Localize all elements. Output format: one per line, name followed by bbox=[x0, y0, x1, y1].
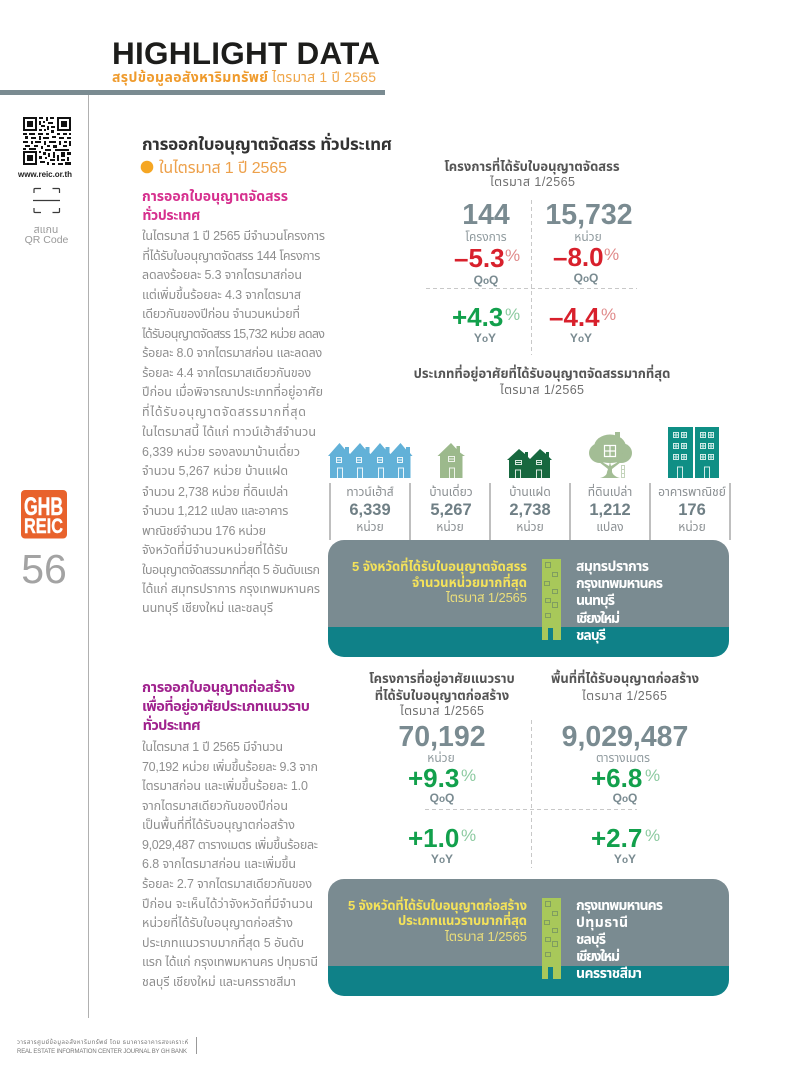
province list: ชลบุรี bbox=[576, 627, 606, 644]
housing types heading bbox=[414, 364, 670, 397]
column: semi-detached house: บ้านแฝด bbox=[509, 485, 551, 499]
stat: 70,192 units: 70,192 bbox=[398, 721, 486, 753]
panel heading: จำนวนหน่วยมากที่สุด bbox=[412, 573, 527, 590]
column: detached house: บ้านเดี่ยว bbox=[429, 483, 473, 499]
section 2 body text: ไตรมาสก่อน และเพิ่มขึ้นร้อยละ 1.0 bbox=[141, 777, 308, 793]
stats heading: horizontal housing bbox=[369, 669, 515, 718]
section 2 body text: ร้อยละ 2.7 จากไตรมาสเดียวกันของ bbox=[142, 877, 312, 891]
housing type columns bbox=[330, 483, 730, 540]
province list: เชียงใหม่ bbox=[576, 948, 620, 964]
section 1 body text: แต่เพิ่มขึ้นร้อยละ 4.3 จากไตรมาส bbox=[142, 286, 301, 302]
stat: projects YoY: +4.3 bbox=[452, 302, 503, 332]
section 2 body text: หน่วยที่ได้รับใบอนุญาตก่อสร้าง bbox=[142, 914, 293, 930]
panel heading bbox=[352, 557, 527, 605]
panel heading bbox=[348, 896, 527, 944]
section 2 body text: 9,029,487 ตารางเมตร เพิ่มขึ้นร้อยละ bbox=[142, 836, 318, 852]
stat: projects QoQ: –5.3 bbox=[454, 243, 505, 273]
sidebar divider bbox=[88, 95, 89, 1018]
scan caption bbox=[25, 224, 69, 246]
column: semi-detached house bbox=[509, 485, 551, 534]
section 2 body text: 70,192 หน่วย เพิ่มขึ้นร้อยละ 9.3 จาก bbox=[142, 758, 318, 774]
section 1 body text: นนทบุรี เชียงใหม่ และชลบุรี bbox=[142, 601, 273, 615]
stat: units QoQ: QoQ bbox=[430, 791, 454, 805]
province list: นครราชสีมา bbox=[576, 965, 642, 981]
icon: vacant land tree bbox=[589, 432, 632, 478]
section 1 body text: ได้รับอนุญาตจัดสรร 15,732 หน่วย ลดลง bbox=[141, 327, 325, 341]
section 2 body text: ชลบุรี เชียงใหม่ และนครราชสีมา bbox=[142, 975, 296, 989]
footer credit: REAL ESTATE INFORMATION CENTER JOURNAL BY GH BANK bbox=[17, 1049, 187, 1055]
stats heading: permitted projects: ไตรมาส 1/2565 bbox=[489, 175, 575, 189]
stats heading: permitted area: พื้นที่ที่ได้รับอนุญาตก่อสร้าง bbox=[551, 669, 699, 686]
column: semi-detached house: หน่วย bbox=[516, 520, 544, 534]
stat: area QoQ: +6.8 bbox=[591, 763, 642, 793]
province list bbox=[576, 558, 663, 644]
province list: ชลบุรี bbox=[576, 931, 606, 948]
column: detached house: 5,267 bbox=[430, 501, 472, 519]
stat: projects QoQ: QoQ bbox=[474, 273, 498, 287]
stat: 70,192 units: หน่วย bbox=[427, 751, 455, 765]
province list: เชียงใหม่ bbox=[576, 610, 620, 626]
column: commercial bbox=[658, 485, 726, 534]
stat: 15,732 units: 15,732 bbox=[545, 199, 633, 231]
stat: units QoQ: +9.3 bbox=[408, 763, 459, 793]
stats heading: horizontal housing: ไตรมาส 1/2565 bbox=[399, 704, 484, 718]
logo: GHB REIC: REIC bbox=[24, 515, 63, 538]
section 1 body text: จำนวน 1,212 แปลง และอาคาร bbox=[142, 504, 288, 518]
section 2 heading: ทั่วประเทศ bbox=[143, 715, 201, 734]
housing types heading: ประเภทที่อยู่อาศัยที่ได้รับอนุญาตจัดสรรมากที่สุด bbox=[414, 364, 670, 382]
panel heading: 5 จังหวัดที่ได้รับใบอนุญาตจัดสรร bbox=[352, 557, 527, 574]
section 1 body text: เดียวกันของปีก่อน จำนวนหน่วยที่ bbox=[142, 305, 300, 321]
stat: area YoY: % bbox=[645, 826, 660, 845]
icon: semi-detached house bbox=[507, 449, 552, 478]
section 1 body text: จังหวัดที่มีจำนวนหน่วยที่ได้รับ bbox=[142, 541, 288, 557]
section 1 body text: ลดลงร้อยละ 5.3 จากไตรมาสก่อน bbox=[142, 268, 302, 282]
subtitle bbox=[112, 69, 376, 87]
stats panel: construction permits bbox=[398, 720, 688, 868]
stat: projects YoY: YoY bbox=[474, 331, 496, 345]
section 2 heading bbox=[142, 679, 310, 734]
province list bbox=[576, 897, 663, 981]
stat: units YoY: % bbox=[461, 826, 476, 845]
housing types heading: ไตรมาส 1/2565 bbox=[499, 383, 584, 397]
stats panel: allocation permits bbox=[426, 199, 637, 355]
section 1 body text: 6,339 หน่วย รองลงมาบ้านเดี่ยว bbox=[142, 443, 300, 459]
website url: www.reic.or.th bbox=[17, 170, 72, 179]
column: detached house bbox=[429, 483, 473, 534]
section 1 body text: พาณิชย์จำนวน 176 หน่วย bbox=[142, 524, 266, 538]
panel heading: ประเภทแนวราบมากที่สุด bbox=[398, 911, 527, 928]
stat: projects QoQ: % bbox=[505, 246, 520, 265]
icon: green tower bbox=[542, 898, 561, 979]
icon: scan frame bbox=[33, 188, 60, 212]
stat: units YoY: +1.0 bbox=[408, 823, 459, 853]
panel heading: 5 จังหวัดที่ได้รับใบอนุญาตก่อสร้าง bbox=[348, 896, 527, 913]
section 1 body text: จำนวน 5,267 หน่วย บ้านแฝด bbox=[142, 464, 288, 478]
section 1 body text: ใบอนุญาตจัดสรรมากที่สุด 5 อันดับแรก bbox=[142, 561, 320, 577]
footer credit bbox=[17, 1037, 197, 1055]
province list: ปทุมธานี bbox=[576, 914, 628, 931]
section 1 body text bbox=[141, 229, 325, 615]
stat: projects YoY: % bbox=[505, 305, 520, 324]
column: semi-detached house: 2,738 bbox=[509, 501, 551, 519]
stat: units QoQ: –8.0 bbox=[553, 242, 604, 272]
stat: area YoY: +2.7 bbox=[591, 823, 642, 853]
stat: units YoY: YoY bbox=[570, 331, 592, 345]
stat: units YoY: YoY bbox=[431, 852, 453, 866]
section 1 body text: ร้อยละ 4.4 จากไตรมาสเดียวกันของ bbox=[142, 366, 311, 380]
section 1 body text: ในไตรมาส 1 ปี 2565 มีจำนวนโครงการ bbox=[142, 229, 325, 243]
panel heading: ไตรมาส 1/2565 bbox=[444, 929, 527, 944]
icon: green tower bbox=[542, 559, 561, 640]
icon: commercial buildings bbox=[668, 427, 719, 478]
section 2 body text: ประเภทแนวราบมากที่สุด 5 อันดับ bbox=[142, 934, 304, 950]
scan caption: QR Code bbox=[25, 234, 69, 246]
panel: top 5 provinces, construction bbox=[328, 879, 729, 996]
icon: QR code bbox=[23, 117, 71, 165]
section 1 body text: ที่ได้รับใบอนุญาตจัดสรร 144 โครงการ bbox=[142, 247, 320, 263]
column: commercial: อาคารพาณิชย์ bbox=[658, 485, 726, 499]
section 2 body text: เป็นพื้นที่ที่ได้รับอนุญาตก่อสร้าง bbox=[142, 816, 295, 832]
column: vacant land: ที่ดินเปล่า bbox=[588, 483, 632, 499]
stat: units YoY: –4.4 bbox=[549, 302, 600, 332]
province list: กรุงเทพมหานคร bbox=[576, 575, 663, 592]
column: commercial: หน่วย bbox=[678, 520, 706, 534]
subtitle: สรุปข้อมูลอสังหาริมทรัพย์ bbox=[112, 69, 268, 87]
header rule bbox=[0, 90, 385, 95]
section 2 body text: 6.8 จากไตรมาสก่อน และเพิ่มขึ้น bbox=[142, 855, 296, 871]
section 1 heading bbox=[142, 188, 288, 223]
stat: projects YoY bbox=[452, 302, 520, 345]
stat: projects QoQ bbox=[454, 243, 520, 287]
stats heading: permitted projects bbox=[444, 157, 620, 189]
footer credit: วารสารศูนย์ข้อมูลอสังหาริมทรัพย์ โดย ธนาคารอาคารสงเคราะห์ bbox=[17, 1039, 188, 1046]
column: vacant land: แปลง bbox=[596, 520, 624, 534]
stats heading: horizontal housing: โครงการที่อยู่อาศัยแนวราบ bbox=[369, 669, 515, 687]
scan caption: สแกน bbox=[34, 224, 58, 236]
province list: นนทบุรี bbox=[576, 592, 615, 609]
subtitle: ไตรมาส 1 ปี 2565 bbox=[271, 69, 376, 85]
title: HIGHLIGHT DATA bbox=[112, 35, 380, 71]
section 1 body text: จำนวน 2,738 หน่วย ที่ดินเปล่า bbox=[142, 483, 288, 499]
section 1 body text: ปีก่อน เมื่อพิจารณาประเภทที่อยู่อาศัย bbox=[142, 383, 323, 399]
column: vacant land bbox=[588, 483, 632, 534]
stat: 15,732 units: หน่วย bbox=[574, 230, 602, 244]
section 2 body text: ปีก่อน จะเห็นได้ว่าจังหวัดที่มีจำนวน bbox=[142, 895, 313, 911]
stat: units YoY bbox=[408, 823, 476, 866]
stats heading: horizontal housing: ที่ได้รับใบอนุญาตก่อสร้าง bbox=[375, 686, 509, 703]
section 1 body text: ได้แก่ สมุทรปราการ กรุงเทพมหานคร bbox=[141, 582, 320, 596]
stats heading: permitted area: ไตรมาส 1/2565 bbox=[581, 689, 667, 703]
section 2 body text: แรก ได้แก่ กรุงเทพมหานคร ปทุมธานี bbox=[142, 955, 318, 969]
stats heading: permitted projects: โครงการที่ได้รับใบอนุญาตจัดสรร bbox=[444, 157, 620, 174]
section 1 heading: ทั่วประเทศ bbox=[142, 205, 200, 223]
province list: กรุงเทพมหานคร bbox=[576, 897, 663, 914]
stat: area QoQ bbox=[591, 763, 660, 805]
icon: townhouse bbox=[328, 443, 412, 478]
icon: detached house bbox=[438, 443, 465, 478]
panel: top 5 provinces, allocation bbox=[328, 540, 729, 657]
stat: 9,029,487 sqm: 9,029,487 bbox=[562, 721, 688, 753]
stat: area QoQ: QoQ bbox=[613, 791, 637, 805]
quarter tag: ในไตรมาส 1 ปี 2565 bbox=[159, 160, 287, 177]
column: townhouse: ทาวน์เฮ้าส์ bbox=[346, 485, 394, 499]
stat: units QoQ: QoQ bbox=[574, 271, 598, 285]
stat: units QoQ bbox=[553, 242, 619, 285]
section 1 body text: ที่ได้รับอนุญาตจัดสรรมากที่สุด bbox=[142, 403, 306, 419]
page number: 56 bbox=[21, 546, 67, 592]
section 2 body text: ในไตรมาส 1 ปี 2565 มีจำนวน bbox=[142, 740, 283, 754]
section 2 body text bbox=[141, 740, 318, 989]
panel heading: ไตรมาส 1/2565 bbox=[445, 590, 527, 605]
stat: 9,029,487 sqm: ตารางเมตร bbox=[596, 751, 650, 765]
stats heading: permitted area bbox=[551, 669, 699, 703]
stat: units YoY: % bbox=[601, 305, 616, 324]
section 2 heading: เพื่อที่อยู่อาศัยประเภทแนวราบ bbox=[142, 695, 310, 716]
section 1 body text: ร้อยละ 8.0 จากไตรมาสก่อน และลดลง bbox=[142, 346, 322, 360]
logo: GHB REIC: GHB bbox=[24, 493, 63, 521]
stat: units QoQ: % bbox=[604, 245, 619, 264]
stat: area YoY: YoY bbox=[614, 852, 636, 866]
stat: units QoQ bbox=[408, 763, 476, 805]
stat: 144 projects: โครงการ bbox=[465, 230, 507, 244]
main heading: การออกใบอนุญาตจัดสรร ทั่วประเทศ bbox=[142, 133, 392, 155]
column: detached house: หน่วย bbox=[436, 520, 464, 534]
logo: GHB REIC bbox=[21, 490, 67, 538]
section 1 heading: การออกใบอนุญาตจัดสรร bbox=[142, 188, 288, 205]
column: townhouse: 6,339 bbox=[349, 501, 391, 519]
stat: area YoY bbox=[591, 823, 660, 866]
column: vacant land: 1,212 bbox=[589, 501, 631, 519]
stat: area QoQ: % bbox=[645, 766, 660, 785]
column: townhouse bbox=[346, 485, 394, 534]
column: townhouse: หน่วย bbox=[356, 520, 384, 534]
section 2 body text: จากไตรมาสเดียวกันของปีก่อน bbox=[142, 799, 288, 813]
column: commercial: 176 bbox=[678, 501, 706, 519]
stat: units QoQ: % bbox=[461, 766, 476, 785]
stat: units YoY bbox=[549, 302, 616, 345]
province list: สมุทรปราการ bbox=[576, 558, 649, 575]
stat: 144 projects: 144 bbox=[462, 199, 510, 231]
section 1 body text: ในไตรมาสนี้ ได้แก่ ทาวน์เฮ้าส์จำนวน bbox=[142, 423, 316, 439]
section 2 heading: การออกใบอนุญาตก่อสร้าง bbox=[142, 679, 295, 696]
